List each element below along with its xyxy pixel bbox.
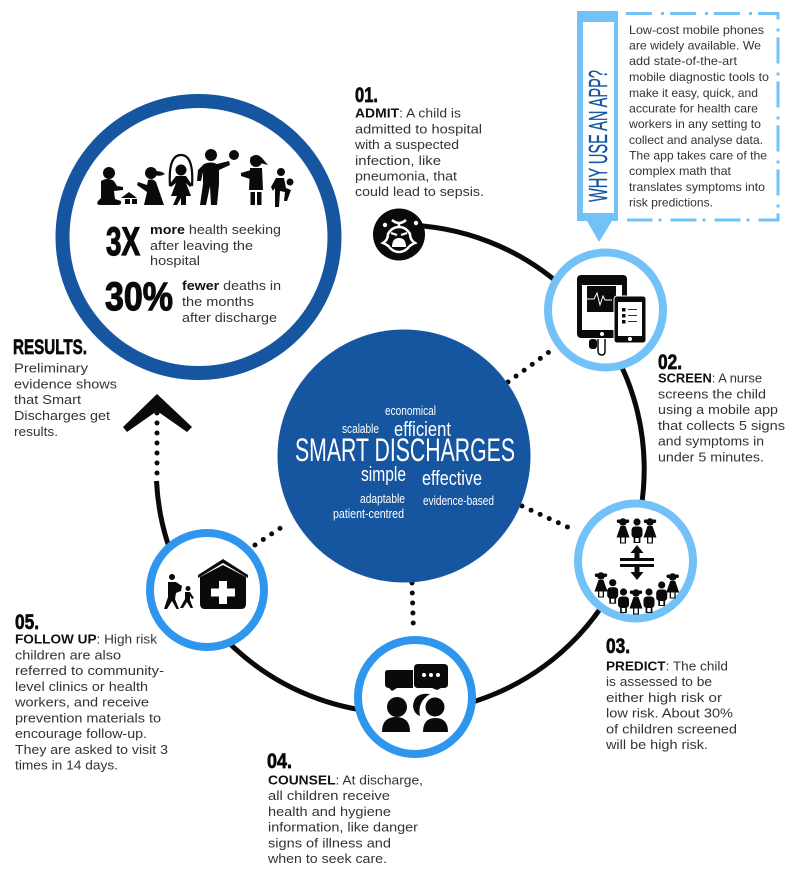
step 05: follow up text: referred to community-: [15, 663, 164, 678]
panel: centre circle word cloud: [278, 330, 530, 582]
step 04: counsel text: all children receive: [268, 788, 390, 803]
icon: crying child (admit): [373, 208, 425, 260]
text block: why use an app: Low-cost mobile phones: [629, 23, 764, 37]
stat text: fewer deaths: fewer deaths in: [182, 278, 281, 293]
step number 03: 03.: [606, 634, 630, 658]
heading: Smart Discharges: SMART DISCHARGES: [295, 432, 515, 468]
step 01: admit text: pneumonia, that: [355, 168, 457, 184]
step number 05: 05.: [15, 610, 39, 634]
icon: children playing: [97, 149, 294, 207]
results text: evidence shows: [14, 376, 118, 392]
step 01: admit text: could lead to sepsis.: [355, 184, 484, 199]
results text: results.: [14, 424, 58, 439]
step 02: screen text: and symptoms in: [658, 434, 764, 448]
step 01: admit text: with a suspected: [354, 137, 459, 152]
step 05: follow up text: FOLLOW UP : High risk: [15, 632, 158, 646]
stat text line: hospital: [150, 253, 200, 268]
step 03: predict circle and people icon: [578, 504, 693, 618]
step 05: follow up text: workers, and receive: [14, 694, 149, 710]
word: effective: effective: [422, 468, 482, 490]
step 03: predict text: either high risk or: [606, 690, 723, 705]
step number 01: 01.: [355, 83, 378, 107]
stat text line: the months: [182, 294, 255, 309]
step 02: screen text: [658, 350, 786, 464]
panel: why use an app banner: [577, 11, 618, 242]
step 04: counsel text: information, like danger: [268, 820, 419, 834]
step 02: screen text: under 5 minutes.: [658, 450, 764, 464]
step 03: predict text: of children screened: [606, 722, 737, 736]
step 04: counsel text: health and hygiene: [268, 804, 391, 819]
main process ring: [156, 225, 644, 713]
text block: why use an app: The app takes care of the: [629, 148, 767, 162]
text block: why use an app: translates symptoms into: [629, 180, 765, 194]
word: simple: simple: [361, 464, 406, 486]
heading: results: RESULTS.: [13, 335, 87, 359]
step 03: predict text: low risk. About 30%: [606, 706, 733, 720]
step number 02: 02.: [658, 350, 682, 374]
text block: why use an app: mobile diagnostic tools to: [629, 70, 769, 84]
word: scalable: scalable: [342, 421, 379, 436]
step 05: follow up text: prevention materials to: [15, 710, 161, 726]
dotted connectors from centre to steps: [157, 347, 574, 632]
word: efficient: efficient: [394, 419, 451, 441]
step 05: follow up text: level clinics or health: [15, 679, 148, 694]
step 03: predict text: will be high risk.: [605, 737, 708, 752]
step number 04: 04.: [267, 749, 292, 773]
text block: why use an app: accurate for health care: [629, 102, 758, 116]
icon: two people talking: [382, 664, 448, 732]
word: adaptable: adaptable: [360, 491, 405, 506]
step 02: screen text: using a mobile app: [658, 402, 778, 417]
stat text: more health seeking: more health seeking: [150, 222, 281, 237]
step 05: follow up text: [14, 610, 168, 772]
step 04: counsel text: when to seek care.: [267, 851, 387, 866]
results text: [13, 335, 118, 439]
step 02: screen text: SCREEN: A nurse: [658, 370, 762, 386]
step 01: admit text: ADMIT: A child is: [355, 106, 462, 120]
step 05: follow up text: children are also: [15, 648, 121, 662]
step 03: predict text: PREDICT: The child: [606, 658, 728, 674]
results text: Discharges get: [14, 408, 110, 423]
step 01: admit text: admitted to hospital: [355, 122, 482, 136]
stat text line: after discharge: [182, 310, 277, 325]
text block: why use an app: are widely available. We: [629, 38, 761, 52]
word: economical: economical: [385, 403, 436, 418]
word: evidence-based: evidence-based: [423, 493, 494, 508]
panel: results circle: [62, 101, 334, 373]
text block: why use an app: add state-of-the-art: [629, 54, 738, 68]
step 01: admit text: [354, 83, 484, 199]
step 03: predict text: [605, 634, 737, 752]
stat text line: after leaving the: [150, 238, 253, 253]
step 03: predict text: is assessed to be: [606, 674, 712, 689]
icon: clinic and walking family: [164, 559, 248, 609]
step 04: counsel circle and people icon: [358, 640, 472, 754]
step 02: screen text: screens the child: [658, 386, 766, 402]
step 04: counsel text: [267, 749, 423, 866]
step 05: follow up text: times in 14 days.: [15, 758, 118, 772]
step 05: follow up text: They are asked to visit 3: [15, 742, 168, 757]
results text: that Smart: [14, 392, 81, 407]
arrow: results chevron: [123, 394, 192, 432]
step 05: follow up circle and clinic icon: [150, 533, 264, 647]
stat: 30%: 30%: [105, 275, 173, 319]
icon: tablet and phone: [577, 275, 646, 355]
dashed text box: [626, 14, 778, 220]
text block: why use an app: collect and analyse data.: [629, 133, 763, 147]
stat: 3X: 3X: [106, 220, 140, 264]
step 02: screen text: that collects 5 signs: [658, 418, 786, 433]
step 04: counsel text: COUNSEL : At discharge,: [268, 772, 423, 788]
step 01: admit text: infection, like: [355, 153, 441, 168]
text block: why use an app: make it easy, quick, and: [629, 86, 758, 100]
word: patient-centred: patient-centred: [333, 506, 404, 521]
step 05: follow up text: encourage follow-up.: [15, 726, 147, 741]
text block: why use an app: [628, 23, 769, 210]
step 02: screen circle and tablet icon: [548, 252, 663, 368]
text block: why use an app: workers in any setting to: [628, 117, 761, 131]
results text: Preliminary: [14, 360, 89, 376]
text block: why use an app: complex math that: [629, 164, 732, 178]
icon: high and low risk groups: [594, 518, 679, 614]
text block: why use an app: risk predictions.: [629, 196, 713, 210]
step 04: counsel text: signs of illness and: [268, 836, 391, 850]
